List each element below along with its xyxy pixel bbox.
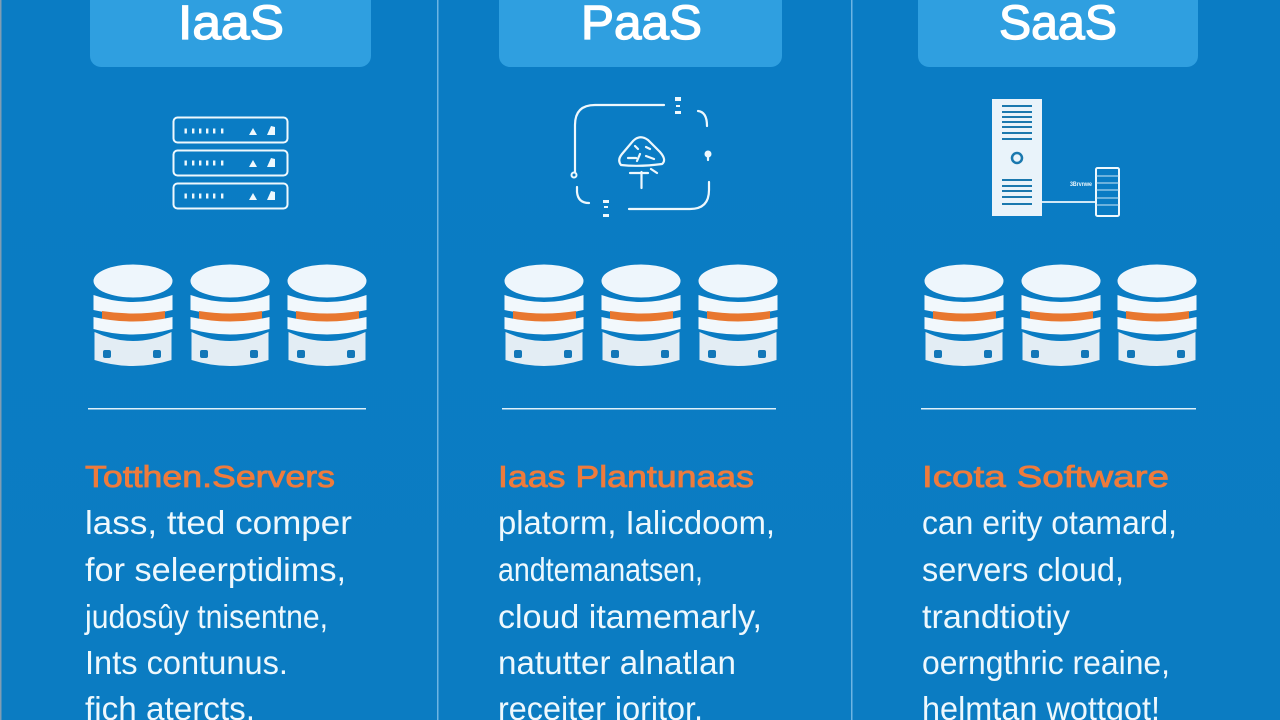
body text: platorm, Ialicdoom, [498, 504, 775, 541]
body text: lass, tted comper [85, 504, 352, 541]
header: IaaS [90, 0, 371, 67]
body text: trandtiotiy [922, 598, 1071, 635]
divider 1 [437, 0, 438, 720]
body text: for seleerptidims, [85, 551, 346, 588]
panel: IaaS [84, 0, 371, 720]
heading: Icota Software [922, 459, 1169, 494]
database cylinders [504, 264, 778, 366]
body text: natutter alnatlan [498, 644, 736, 681]
icon: server tower: 3Brvnwe [1070, 181, 1092, 188]
body text [498, 504, 775, 720]
body text: oerngthric reaine, [922, 644, 1170, 681]
body text: servers cloud, [922, 551, 1124, 588]
body text: Ints contunus. [85, 644, 288, 681]
body text: judosûy tnisentne, [84, 598, 328, 635]
icon: cloud platform [572, 97, 712, 217]
body text [922, 504, 1177, 720]
heading: Totthen.Servers [85, 459, 335, 494]
body text: cloud itamemarly, [498, 598, 762, 635]
body text: andtemanatsen, [498, 551, 703, 588]
divider rule [921, 408, 1196, 410]
panel: PaaS [498, 0, 782, 720]
database cylinders [94, 264, 366, 366]
divider rule [502, 408, 776, 410]
body text: can erity otamard, [922, 504, 1177, 541]
header: SaaS [918, 0, 1198, 67]
icon: server rack [174, 118, 288, 208]
icon: server tower [992, 99, 1119, 216]
body text [84, 504, 352, 720]
left edge [0, 0, 2, 720]
panel: SaaS [918, 0, 1198, 720]
header: PaaS [499, 0, 782, 67]
divider rule [88, 408, 366, 410]
divider 2 [851, 0, 852, 720]
heading: Iaas Plantunaas [498, 459, 754, 494]
database cylinders [924, 264, 1196, 366]
